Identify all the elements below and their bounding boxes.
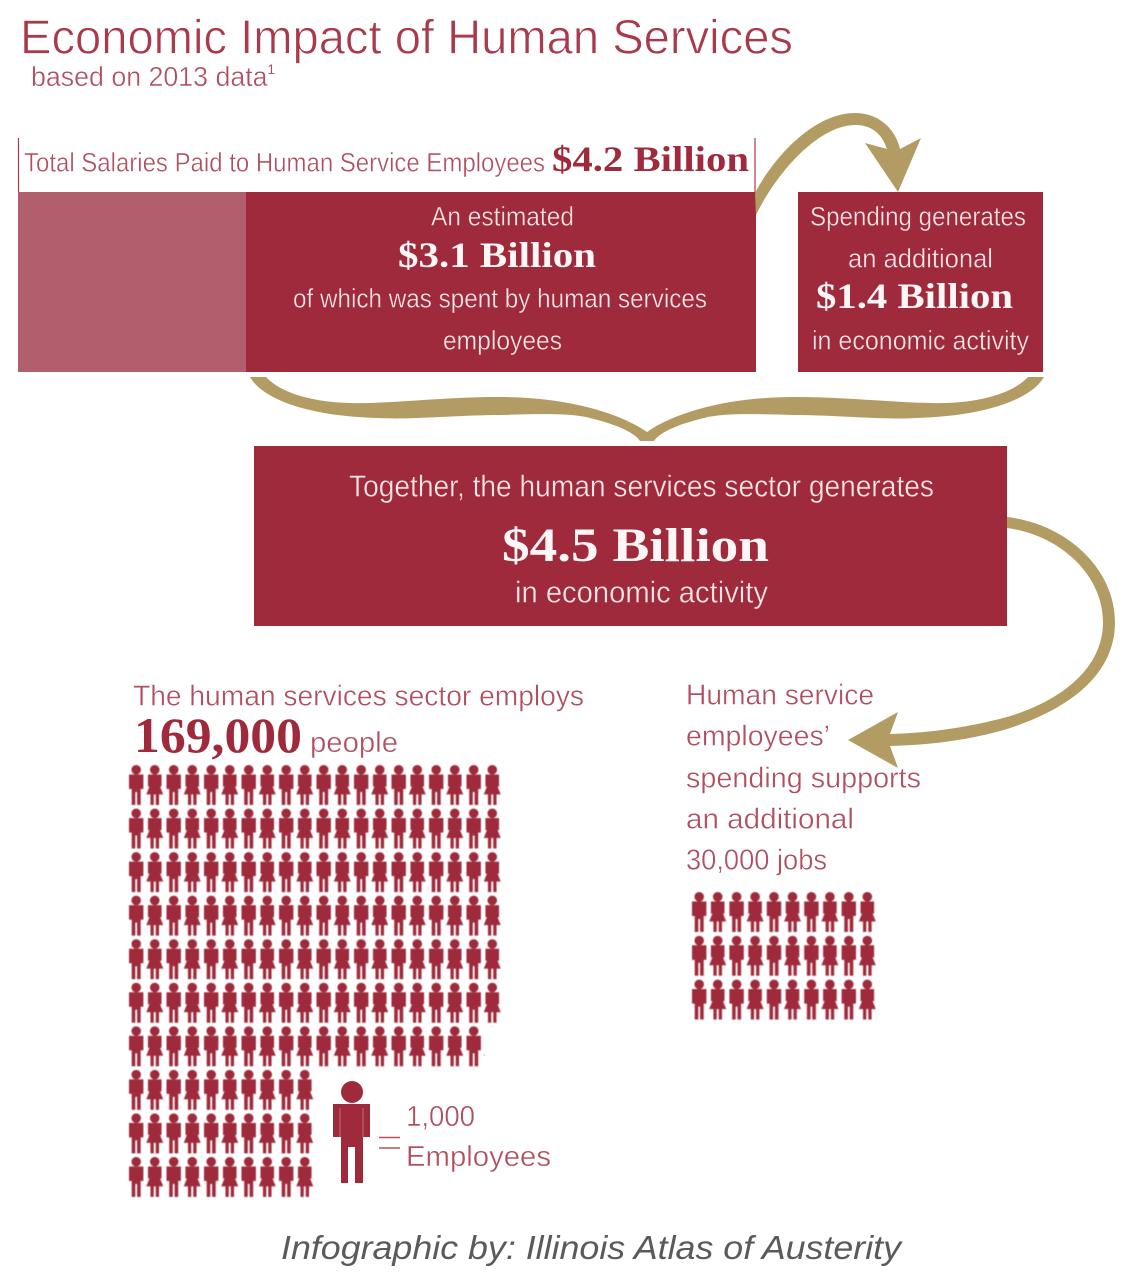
- spent text: of which was spent by human services: [293, 284, 707, 314]
- unspent share: [18, 192, 246, 372]
- legend: one figure equals 1,000 employees: Employees: [406, 1141, 551, 1173]
- panel: additional spending: an additional: [848, 244, 993, 274]
- title: Economic Impact of Human Services: [20, 12, 793, 64]
- text: additional jobs: employees’: [686, 720, 830, 752]
- heading: sector employment: The human services sector employs: [133, 680, 584, 712]
- panel: total economic activity: in economic activity: [515, 574, 768, 610]
- total salaries label: Total Salaries Paid to Human Service Employees: [24, 148, 545, 178]
- panel: additional spending: in economic activity: [812, 326, 1029, 356]
- panel: total economic activity: [254, 446, 1007, 626]
- icon: person: [333, 1081, 370, 1183]
- subtitle: 1: [268, 61, 275, 77]
- pictogram: 169 people: [127, 765, 504, 1200]
- text: additional jobs: 30,000 jobs: [686, 844, 827, 876]
- subtitle: based on 2013 data: [31, 61, 279, 92]
- total salaries value: $4.2 Billion: [552, 139, 749, 179]
- text: additional jobs: Human service: [686, 680, 874, 712]
- spent text: An estimated: [431, 202, 574, 232]
- heading: sector employment: 169,000: [134, 707, 302, 763]
- panel: additional spending: Spending generates: [810, 202, 1026, 232]
- text: additional jobs: spending supports: [686, 762, 921, 794]
- arrow: total to jobs: [848, 517, 1115, 768]
- panel: total salaries header: [18, 138, 755, 192]
- arrow: salaries to spending: [755, 113, 921, 215]
- panel: additional spending: [798, 192, 1043, 372]
- panel: total economic activity: Together, the human services sector generates: [349, 468, 934, 504]
- equals sign: [379, 1138, 400, 1148]
- legend: one figure equals 1,000 employees: [333, 1081, 551, 1183]
- spent text: employees: [443, 326, 562, 356]
- panel: salaries bar: [18, 192, 756, 372]
- pictogram: 30 people: [691, 892, 876, 1023]
- text: additional jobs: an additional: [686, 804, 854, 836]
- heading: sector employment: people: [310, 727, 398, 759]
- spent text: $3.1 Billion: [398, 235, 596, 275]
- text: additional jobs: [686, 680, 921, 876]
- panel: total economic activity: $4.5 Billion: [502, 519, 769, 572]
- spent share: [246, 192, 756, 372]
- panel: additional spending: $1.4 Billion: [816, 276, 1013, 316]
- heading: sector employment: [133, 680, 584, 763]
- credit: Infographic by: Illinois Atlas of Austerity: [281, 1229, 904, 1266]
- brace: combining totals: [250, 377, 1044, 441]
- spent text: [293, 202, 707, 356]
- legend text: 1,000: [406, 1101, 475, 1133]
